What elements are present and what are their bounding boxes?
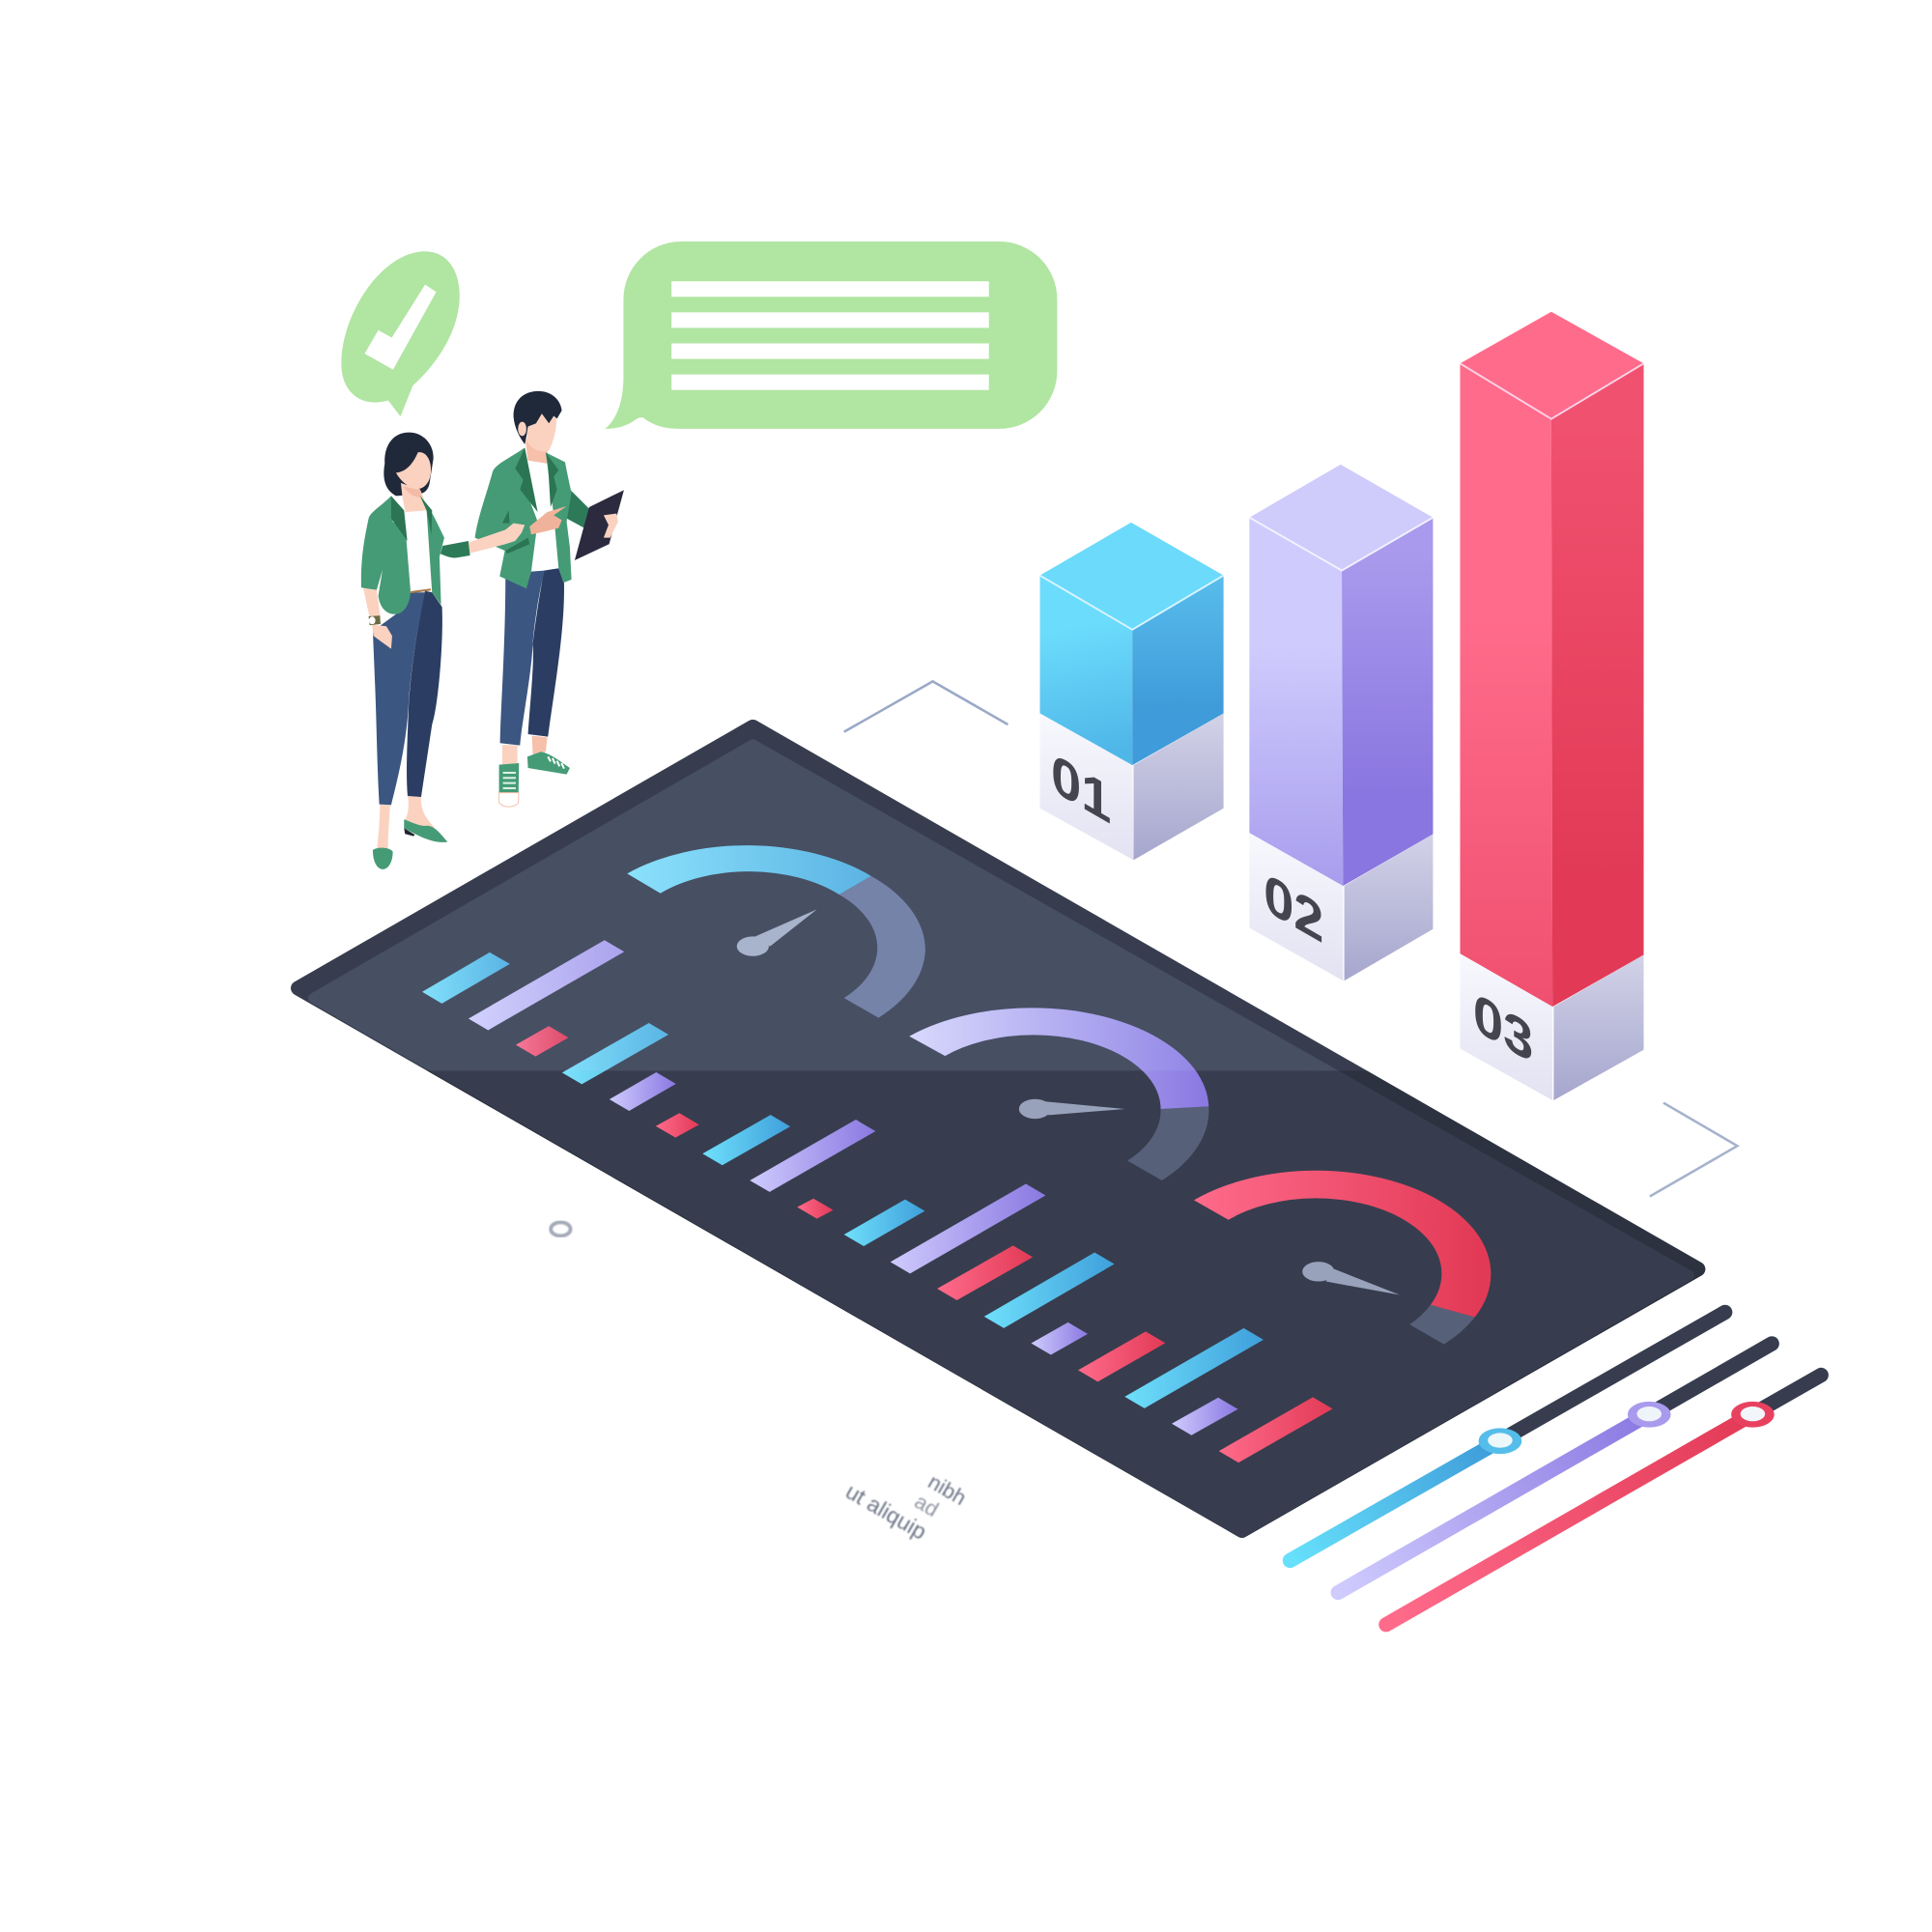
speech bubble (605, 242, 1057, 429)
check mark (365, 285, 437, 370)
faded caption text (841, 1469, 971, 1545)
decorative chevron line right (1650, 1103, 1737, 1197)
bar 01 (1040, 523, 1224, 860)
faded caption text: ut aliquip (841, 1478, 931, 1545)
screen glare overlay (308, 739, 1339, 1070)
slider 2 knob (1628, 1402, 1671, 1428)
bubble text lines (671, 281, 989, 390)
needle 3 (1302, 1262, 1400, 1295)
needle 1 (737, 909, 817, 956)
faded caption text: nibh (924, 1469, 971, 1510)
slider 1 (1290, 1312, 1725, 1560)
bar 03 (1460, 312, 1644, 1100)
bar 02 (1249, 465, 1433, 980)
faded caption text: ad (911, 1489, 943, 1521)
bar chart on panel (422, 940, 1332, 1463)
gauge 3 (1194, 1171, 1491, 1345)
needle 2 (1019, 1099, 1125, 1119)
man figure (475, 391, 624, 807)
slider 2 (1338, 1344, 1772, 1593)
dashboard panel (298, 727, 1698, 1533)
small mark (551, 1222, 571, 1236)
slider 3 knob (1731, 1402, 1775, 1428)
label 01: 01 (1051, 740, 1111, 836)
slider 3 (1386, 1375, 1821, 1625)
gauge 1 (627, 845, 925, 1018)
label 03: 03 (1473, 980, 1533, 1075)
check mark bubble (341, 251, 460, 416)
label 02: 02 (1264, 860, 1323, 955)
gauge 2 (909, 1008, 1208, 1180)
woman figure (361, 433, 525, 869)
slider 1 knob (1479, 1428, 1521, 1454)
decorative chevron line top (844, 681, 1008, 732)
